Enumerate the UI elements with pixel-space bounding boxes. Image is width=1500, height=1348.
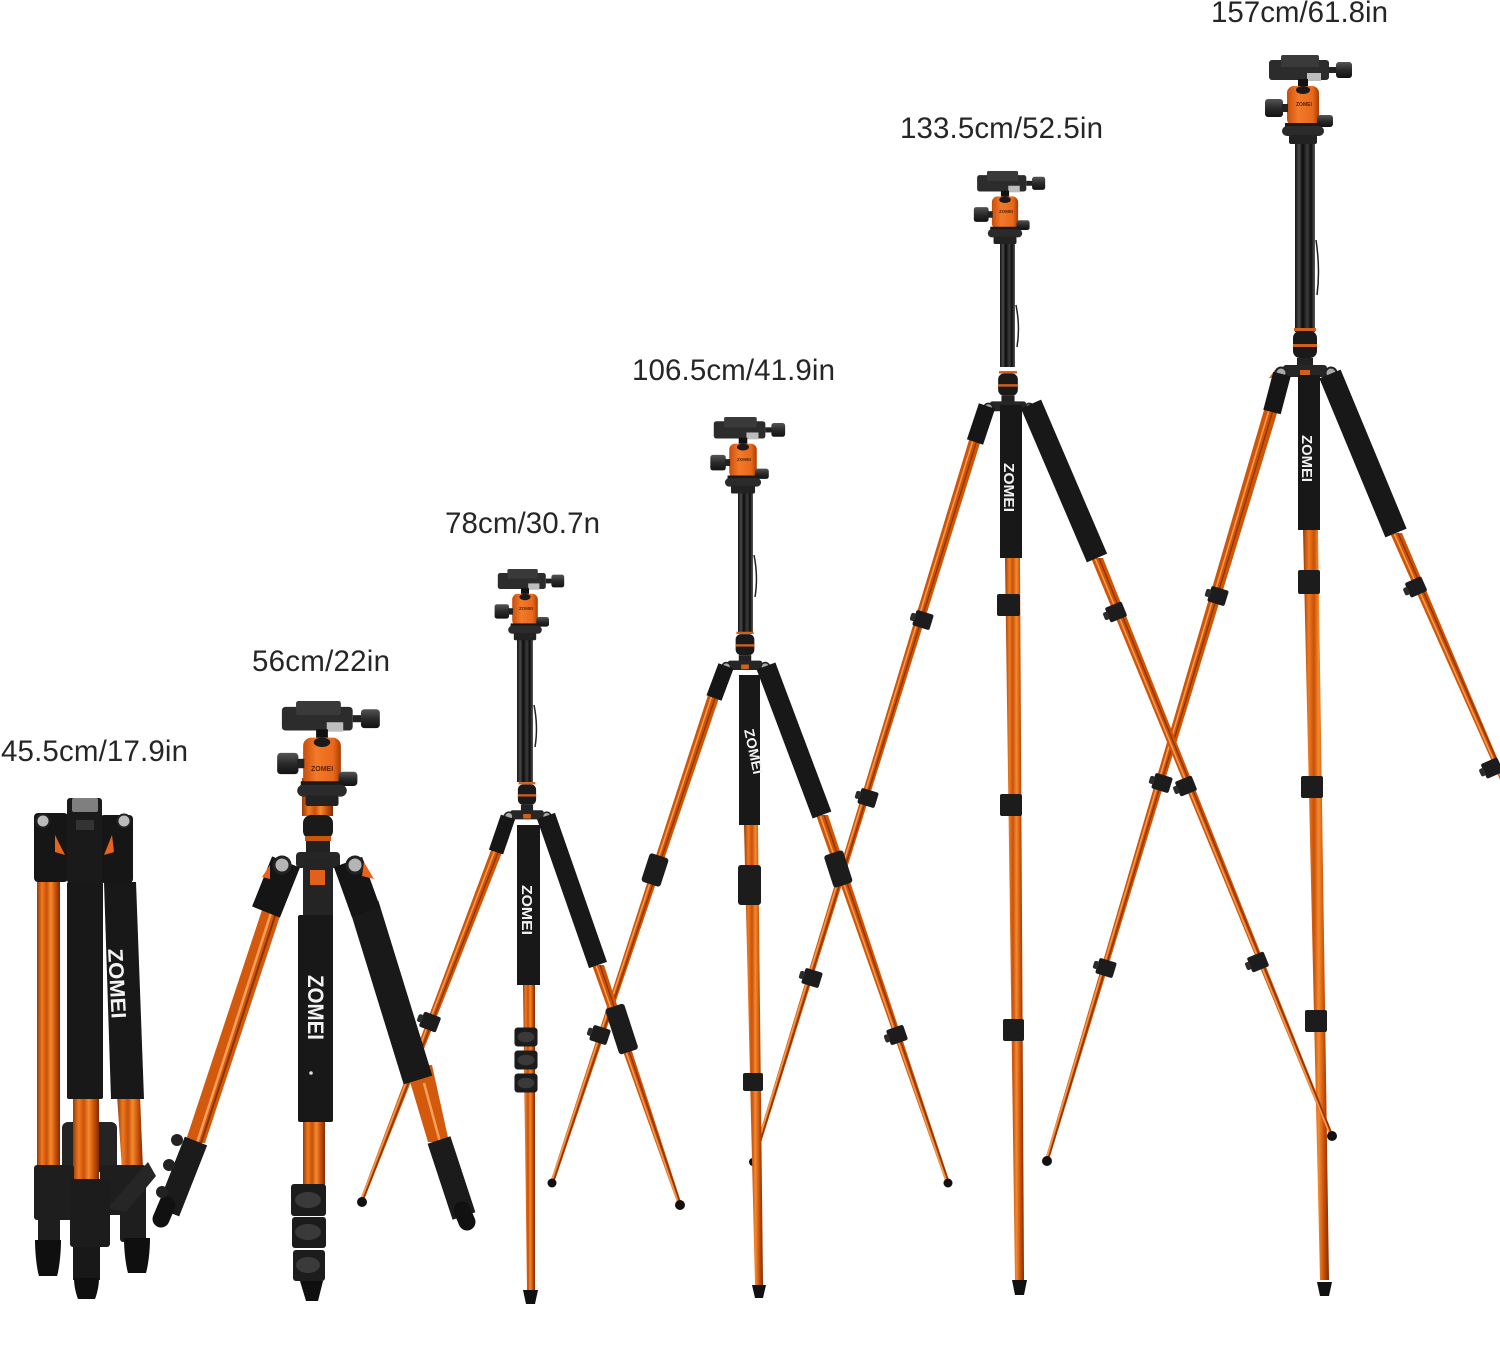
ball head hidden between legs — [62, 1122, 117, 1172]
tripod: 133.5cm: ZOMEI — [999, 209, 1013, 214]
tripod: 56cm short with large foam grips: ZOMEI — [311, 766, 333, 773]
logo on centre foam: ZOMEI — [1000, 463, 1017, 512]
height label: 56cm: 56cm/22in — [252, 645, 390, 678]
tripod: 45.5cm folded — [34, 798, 156, 1299]
tripod: 157cm fully extended: ZOMEI — [1296, 102, 1312, 108]
height label: 106.5cm: 106.5cm/41.9in — [632, 354, 835, 387]
logo on right foam: ZOMEI — [103, 948, 130, 1019]
tube right — [117, 1095, 143, 1170]
tripod: 78cm: ZOMEI — [519, 606, 533, 611]
height label: 45.5cm: 45.5cm/17.9in — [1, 735, 188, 768]
tube left — [37, 882, 60, 1172]
centre tube — [73, 1099, 99, 1181]
logo on centre foam: ZOMEI — [518, 885, 535, 935]
tripod: 106.5cm: ZOMEI — [737, 457, 751, 462]
bottom clamps and feet — [34, 1165, 74, 1220]
leg right — [405, 1065, 449, 1142]
logo on centre foam: ZOMEI — [1298, 435, 1315, 482]
logo on centre foam: ZOMEI — [303, 975, 328, 1040]
logo on centre foam: ZOMEI — [741, 727, 766, 776]
tripod: 56cm short with large foam grips — [156, 701, 467, 1301]
height label: 78cm: 78cm/30.7n — [445, 507, 600, 540]
leg left — [185, 910, 282, 1143]
tripod: 78cm — [357, 569, 685, 1304]
centre leg — [303, 1122, 325, 1186]
tripod: 157cm fully extended — [1042, 55, 1500, 1296]
tripod: 106.5cm — [548, 417, 952, 1298]
tripod: 133.5cm — [749, 171, 1337, 1295]
height label: 133.5cm: 133.5cm/52.5in — [900, 112, 1103, 145]
